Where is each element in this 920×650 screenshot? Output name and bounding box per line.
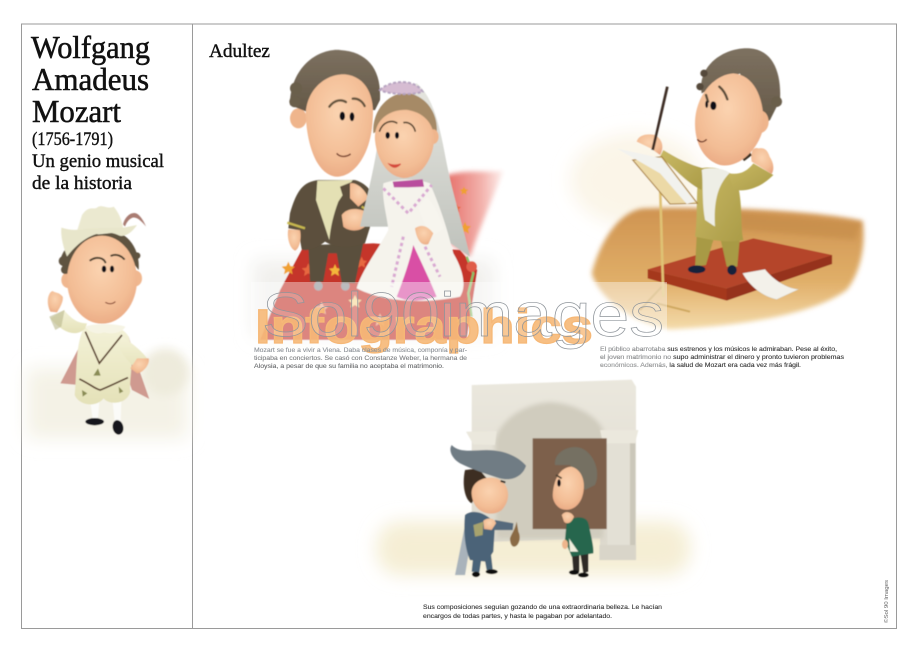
- watermark: Sol90images: Sol90images: [262, 281, 664, 350]
- copyright credit: ©Sol 90 Images: [883, 580, 890, 623]
- caption: patron: Sus composiciones seguían gozando de una extraordinaria belleza. Le hacían: [423, 604, 662, 611]
- watermark band: [251, 282, 667, 346]
- bride: [357, 82, 470, 301]
- caption: conductor: [600, 346, 845, 369]
- patron: [450, 445, 526, 577]
- title block: [31, 29, 164, 194]
- title block: Amadeus: [32, 61, 149, 97]
- groom: [287, 50, 380, 283]
- title block: Mozart: [32, 93, 121, 129]
- watermark: Infographics: Infographics: [255, 301, 593, 354]
- carpet flowers: [282, 187, 471, 326]
- title block: (1756-1791): [32, 129, 113, 150]
- caption: wedding: Aloysia, a pesar de que su familia no aceptaba el matrimonio.: [254, 363, 444, 370]
- Mozart in green coat: [553, 447, 597, 577]
- caption: wedding: Mozart se fue a vivir a Viena. Daba clases de música, componía y par-: [254, 347, 467, 354]
- caption: wedding: ticipaba en conciertos. Se casó con Constanze Weber, la hermana de: [254, 355, 467, 362]
- green bouquet trail: [467, 257, 473, 317]
- caption: conductor: económicos. Además, la salud de Mozart era cada vez más frágil.: [600, 362, 801, 369]
- illustration: Mozart conducting: [570, 48, 864, 329]
- title block: Un genio musical: [32, 151, 164, 172]
- heading: Adultez: Adultez: [209, 41, 270, 62]
- illustration: wedding of Mozart and Constanze: [253, 50, 503, 340]
- title block: de la historia: [32, 173, 133, 194]
- caption: conductor: El público abarrotaba sus estrenos y los músicos le admiraban. Pese al éxito,: [600, 346, 837, 353]
- red platform: [648, 238, 832, 301]
- caption: patron: [423, 604, 662, 620]
- caption: patron: encargos de todas partes, y hasta le pagaban por adelantado.: [423, 613, 612, 620]
- wooden door: [533, 438, 607, 529]
- illustration: young Mozart with hat: [27, 206, 189, 438]
- title block: Wolfgang: [31, 29, 150, 65]
- illustration: patron offering a purse of money: [377, 380, 690, 577]
- caption: wedding: [254, 347, 467, 370]
- stone arch: [466, 380, 638, 560]
- caption: conductor: el joven matrimonio no supo administrar el dinero y pronto tuvieron problemas: [600, 354, 845, 361]
